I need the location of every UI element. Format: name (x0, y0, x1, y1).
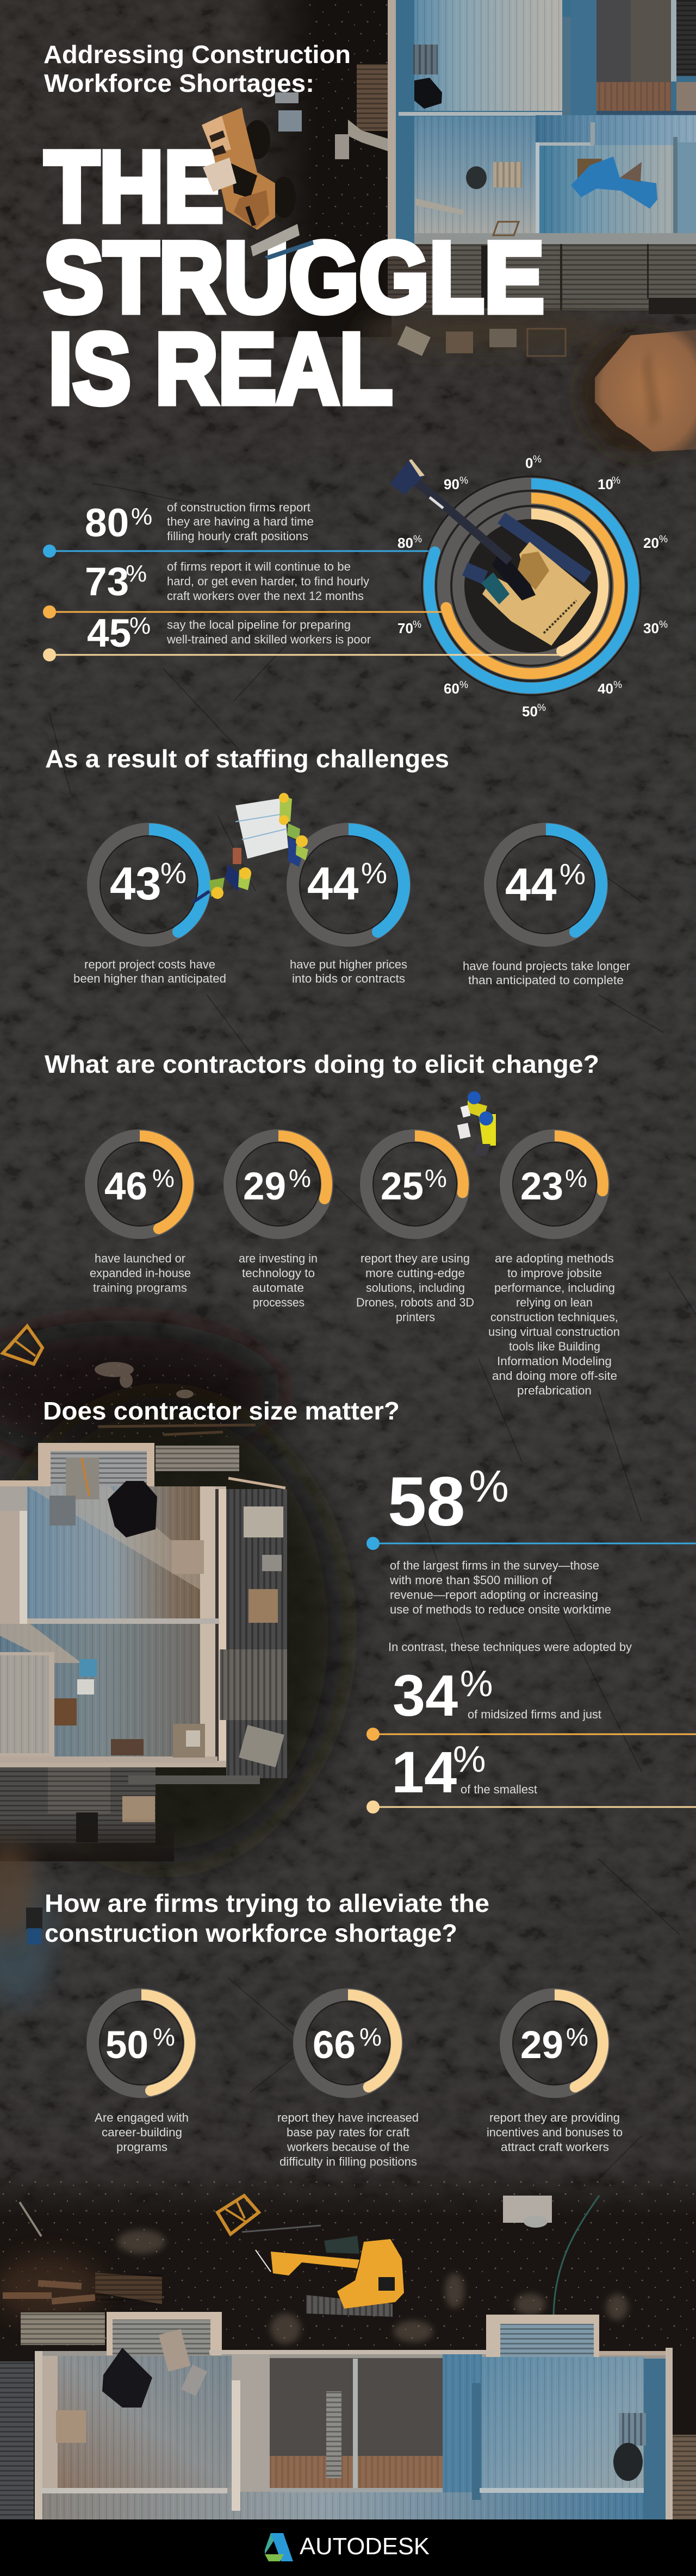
ring scale labels: % (533, 454, 542, 465)
illustration: workers carrying pallet (193, 793, 308, 902)
photo: middle building site (0, 1321, 343, 2005)
caption: printers (396, 1310, 435, 1324)
ring: 80% blue (429, 484, 633, 688)
stat: 45%: well-trained and skilled workers is poor (166, 633, 371, 646)
ring stat: 43%: % (160, 857, 187, 890)
text block: largest firms: use of methods to reduce onsite worktime (390, 1603, 611, 1616)
heading: staffing challenges: As a result of staffing challenges (45, 745, 449, 773)
ring stat: 44%: 44 (307, 858, 359, 910)
ring stat: 29% (230, 1136, 330, 1233)
ring scale labels: % (659, 534, 668, 545)
stat: 73%: craft workers over the next 12 months (167, 589, 364, 603)
stat: 58% (366, 1461, 696, 1550)
caption: have launched or (95, 1252, 185, 1265)
ring scale labels: 50 (522, 703, 538, 720)
ring scale labels: 10 (598, 476, 613, 492)
ring stat: 46%: 46 (104, 1165, 147, 1208)
panel: contractor size stats (366, 1461, 696, 1814)
caption (488, 1252, 620, 1397)
panel: workforce stats (85, 501, 371, 655)
caption: base pay rates for craft (287, 2125, 409, 2139)
caption: career-building (102, 2125, 182, 2139)
stat: 58%: % (469, 1461, 509, 1511)
stat: 73% (85, 560, 369, 604)
photo: bottom building site (0, 2163, 696, 2522)
title: the struggle is real (44, 131, 544, 425)
caption: training programs (93, 1281, 187, 1295)
caption: Information Modeling (497, 1354, 612, 1368)
caption: to improve jobsite (507, 1266, 602, 1280)
ring stat: 29%: % (566, 2023, 588, 2051)
stat: 80% (85, 501, 314, 545)
excavator photo (390, 459, 591, 646)
caption: processes (253, 1296, 304, 1309)
caption (90, 1252, 191, 1295)
heading: alleviate shortage: How are firms trying to alleviate the (45, 1889, 489, 1917)
caption: report they are using (361, 1252, 470, 1265)
logo: Autodesk: AUTODESK (300, 2533, 430, 2560)
caption: technology to (242, 1266, 315, 1280)
stat: 80%: % (131, 503, 152, 530)
ring stat: 29%: % (289, 1164, 311, 1192)
stat: 14%: % (453, 1739, 486, 1780)
ring stat: 66% (300, 1994, 396, 2092)
panel: staffing challenge rings (73, 829, 630, 987)
caption: are investing in (239, 1252, 318, 1265)
ring stat: 43% (94, 829, 204, 940)
text block: largest firms (389, 1559, 611, 1616)
title: subtitle: Addressing Construction (44, 40, 351, 68)
caption: are adopting methods (495, 1252, 614, 1265)
caption: difficulty in filling positions (279, 2155, 417, 2168)
caption: into bids or contracts (292, 972, 405, 985)
caption: workers because of the (287, 2140, 409, 2154)
ring scale labels: % (537, 702, 546, 713)
caption (277, 2111, 419, 2168)
text block: largest firms: of the largest firms in the survey—those (390, 1559, 599, 1572)
ring stat: 50% (93, 1994, 190, 2096)
ring stat: 50%: % (153, 2023, 175, 2051)
illustration: workers with blue hard hats (457, 1091, 496, 1156)
ring stat: 25% (366, 1136, 468, 1233)
stat: 73%: % (126, 560, 147, 587)
ring stat: 44% (490, 829, 601, 940)
ring scale labels: % (459, 475, 468, 486)
stat: 34% (366, 1662, 696, 1741)
stat: 34%: % (460, 1663, 493, 1704)
stat: 45% (87, 611, 371, 655)
heading: alleviate shortage: construction workforce shortage? (45, 1919, 457, 1947)
caption: and doing more off-site (492, 1369, 617, 1383)
ring scale labels: 90 (444, 476, 459, 492)
stat: 34%: 34 (393, 1662, 458, 1728)
ring stat: 44% (293, 829, 404, 940)
ring stat: 66%: 66 (313, 2024, 356, 2067)
stat: 45%: say the local pipeline for preparing (167, 618, 351, 632)
ring stat: 25%: % (425, 1164, 447, 1192)
ring stat: 46% (91, 1136, 188, 1234)
ring scale labels: % (413, 619, 421, 630)
ring scale labels: % (413, 534, 422, 545)
caption: solutions, including (366, 1281, 465, 1295)
ring scale labels: % (659, 619, 668, 630)
title: the struggle is real: THE (45, 131, 223, 243)
panel: alleviation rings (93, 1994, 623, 2168)
ring stat: 23%: 23 (520, 1165, 563, 1208)
footer bar (0, 2519, 696, 2576)
caption: tools like Building (509, 1340, 600, 1353)
title: the struggle is real: IS REAL (48, 313, 393, 425)
ring scale labels: 20 (643, 535, 659, 551)
caption: been higher than anticipated (73, 972, 226, 985)
ring scale labels: 30 (643, 620, 659, 636)
ring scale labels: % (613, 679, 622, 690)
ring: 45% cream (531, 514, 603, 656)
panel: contractor action rings (90, 1136, 620, 1397)
ring scale labels (397, 454, 668, 720)
caption: prefabrication (517, 1384, 592, 1397)
caption: Drones, robots and 3D (356, 1296, 474, 1309)
photo: orange excavator (256, 2236, 404, 2317)
stat: 14%: of the smallest (461, 1783, 537, 1796)
ring stat: 66%: % (359, 2023, 382, 2051)
ring stat: 50%: 50 (105, 2024, 148, 2067)
ring scale labels: 0 (525, 455, 533, 471)
stat: 34%: of midsized firms and just (468, 1708, 601, 1721)
title: subtitle (44, 40, 351, 97)
caption: programs (116, 2140, 167, 2154)
ring scale labels: % (459, 679, 468, 690)
caption (356, 1252, 474, 1324)
leader lines (43, 545, 562, 661)
ring stat: 23%: % (565, 1164, 587, 1192)
stat: 14% (366, 1739, 696, 1814)
stat: 80%: 80 (85, 501, 129, 545)
caption: have found projects take longer (463, 959, 630, 973)
ring stat: 23% (506, 1136, 608, 1233)
photo: top building site (239, 0, 696, 454)
caption (487, 2111, 623, 2154)
text block: largest firms: with more than $500 million of (389, 1573, 552, 1587)
ring scale labels: 70 (397, 620, 413, 636)
icon: Autodesk A mark (265, 2533, 293, 2561)
stat: 73%: of firms report it will continue to be (167, 560, 351, 573)
ring scale labels: 80 (397, 535, 413, 551)
caption: attract craft workers (501, 2140, 609, 2154)
caption: report they are providing (489, 2111, 620, 2124)
stat: 80%: of construction firms report (167, 501, 310, 514)
stat: 80%: filling hourly craft positions (167, 529, 308, 543)
heading: contractor size: Does contractor size matter? (43, 1397, 400, 1425)
ring: 73% orange (440, 498, 619, 674)
caption: incentives and bonuses to (487, 2125, 623, 2139)
caption (290, 958, 407, 985)
ring stat: 29%: 29 (243, 1165, 286, 1208)
ring stat: 43%: 43 (110, 858, 161, 910)
stat: 14%: 14 (391, 1739, 457, 1805)
ring stat: 29%: 29 (520, 2024, 563, 2067)
title: the struggle is real: STRUGGLE (44, 222, 544, 334)
ring stat: 25%: 25 (381, 1165, 424, 1208)
title (44, 40, 544, 425)
ring scale labels: 60 (444, 680, 459, 697)
ring scale labels: 40 (598, 680, 613, 697)
caption: Are engaged with (95, 2111, 189, 2124)
concentric ring chart (390, 454, 668, 720)
caption: have put higher prices (290, 958, 407, 971)
caption: report they have increased (277, 2111, 419, 2124)
caption (73, 958, 226, 985)
ring stat: 44%: % (361, 857, 387, 890)
stat: 73%: 73 (85, 560, 129, 604)
text block: largest firms: revenue—report adopting or increasing (390, 1588, 598, 1602)
stat: 80%: they are having a hard time (167, 515, 314, 528)
heading: contractors: What are contractors doing to elicit change? (45, 1050, 599, 1078)
ring stat: 44%: 44 (505, 859, 557, 911)
heading: alleviate shortage (45, 1889, 489, 1947)
caption: relying on lean (516, 1296, 593, 1309)
text block: in contrast: In contrast, these techniques were adopted by (388, 1640, 632, 1654)
caption: than anticipated to complete (468, 973, 624, 987)
caption: expanded in-house (90, 1266, 191, 1280)
photo: yellow wheel loader (202, 108, 314, 260)
ring stat: 29% (506, 1994, 603, 2092)
caption: using virtual construction (488, 1325, 620, 1339)
ring scale labels: % (612, 475, 620, 486)
caption (95, 2111, 189, 2154)
caption: performance, including (494, 1281, 615, 1295)
stat: 45%: % (129, 612, 151, 639)
caption: automate (252, 1281, 304, 1295)
caption: construction techniques, (490, 1310, 618, 1324)
title: subtitle: Workforce Shortages: (44, 69, 314, 97)
caption (463, 959, 630, 987)
caption: report project costs have (84, 958, 215, 971)
stat: 73%: hard, or get even harder, to find hourly (167, 574, 369, 588)
caption: more cutting-edge (365, 1266, 465, 1280)
stat: 45%: 45 (87, 611, 131, 655)
ring stat: 44%: % (560, 858, 586, 891)
ring stat: 46%: % (152, 1164, 175, 1192)
stat: 58%: 58 (388, 1463, 465, 1541)
caption (239, 1252, 318, 1309)
